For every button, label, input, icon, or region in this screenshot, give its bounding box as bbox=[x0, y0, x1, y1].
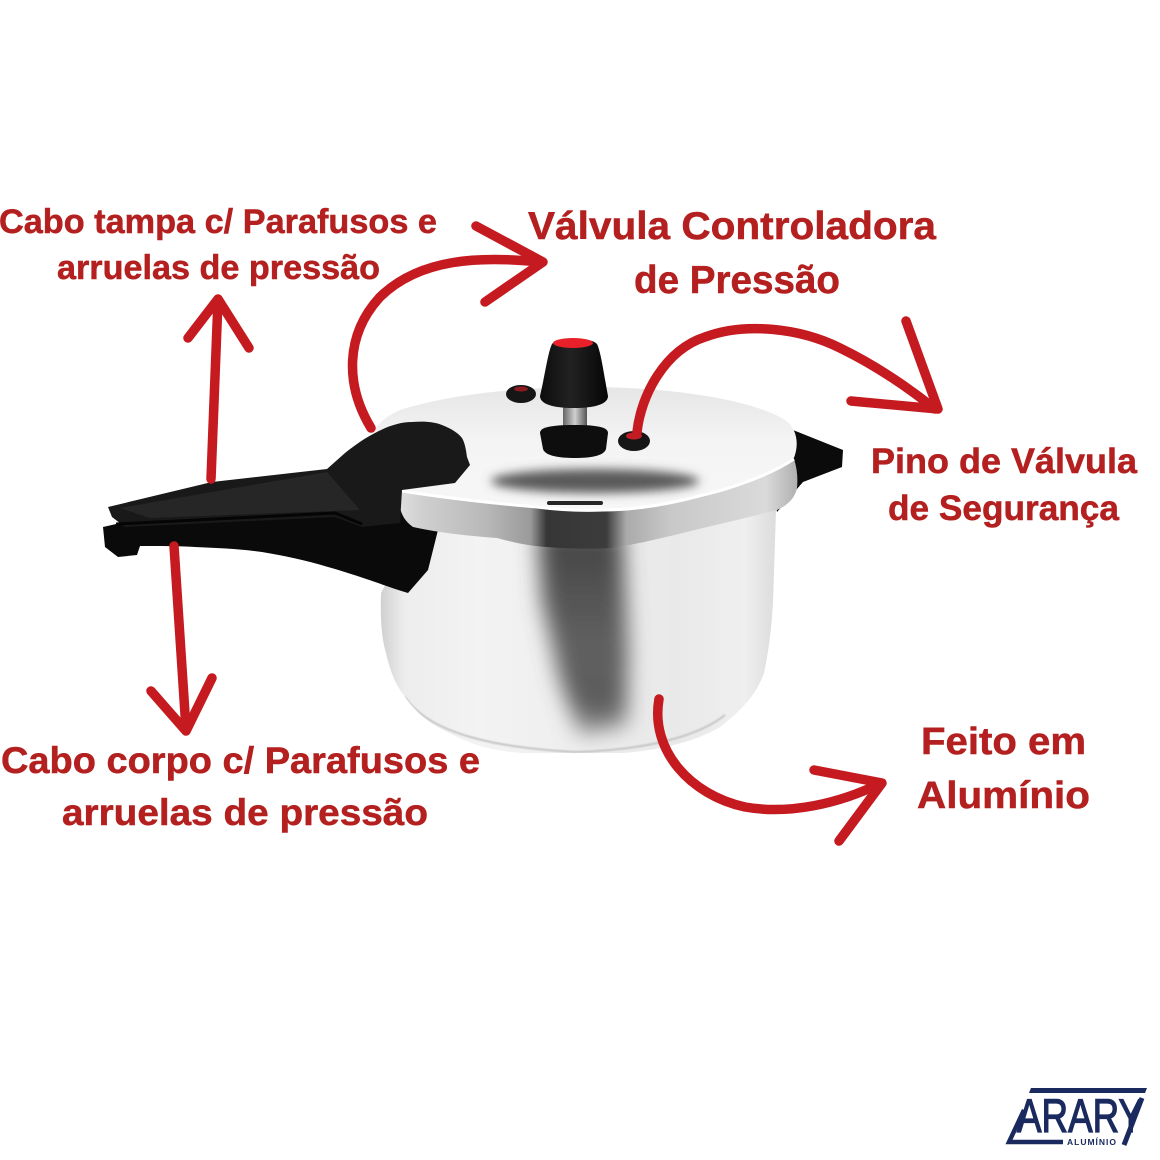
logo: Arary Alumínio: ALUMÍNIO bbox=[1067, 1137, 1116, 1147]
heading: cabo tampa: Cabo tampa c/ Parafusos e bbox=[0, 203, 437, 241]
arrow: to pressure valve label bbox=[353, 226, 543, 428]
pressure cooker bbox=[103, 338, 843, 753]
pressure valve bbox=[540, 338, 608, 458]
arrow: to body handle label bbox=[151, 546, 212, 731]
heading: feito em alumínio: Alumínio bbox=[917, 775, 1090, 817]
arrow: to aluminium label bbox=[658, 699, 882, 841]
arrow: to lid handle label bbox=[188, 299, 249, 479]
lid handle bbox=[108, 422, 470, 527]
heading: cabo tampa: arruelas de pressão bbox=[57, 249, 380, 287]
lid rim bbox=[399, 459, 797, 549]
lid shadow bbox=[491, 469, 699, 493]
heading: válvula controladora: Válvula Controladora bbox=[528, 205, 936, 248]
heading: pino de válvula: Pino de Válvula bbox=[871, 442, 1138, 481]
left safety pin bbox=[506, 385, 536, 403]
safety valve pin bbox=[618, 431, 650, 451]
heading: feito em alumínio: Feito em bbox=[921, 721, 1086, 763]
heading: pino de válvula: de Segurança bbox=[888, 489, 1120, 528]
heading: cabo corpo: Cabo corpo c/ Parafusos e bbox=[1, 740, 480, 781]
arrow: to safety pin label bbox=[637, 321, 938, 432]
pot body bbox=[381, 510, 776, 753]
heading: válvula controladora: de Pressão bbox=[634, 259, 840, 302]
right lid handle bbox=[770, 430, 843, 512]
lower body handle bbox=[103, 510, 438, 593]
lid bbox=[372, 387, 797, 510]
heading: cabo corpo: arruelas de pressão bbox=[62, 792, 428, 833]
